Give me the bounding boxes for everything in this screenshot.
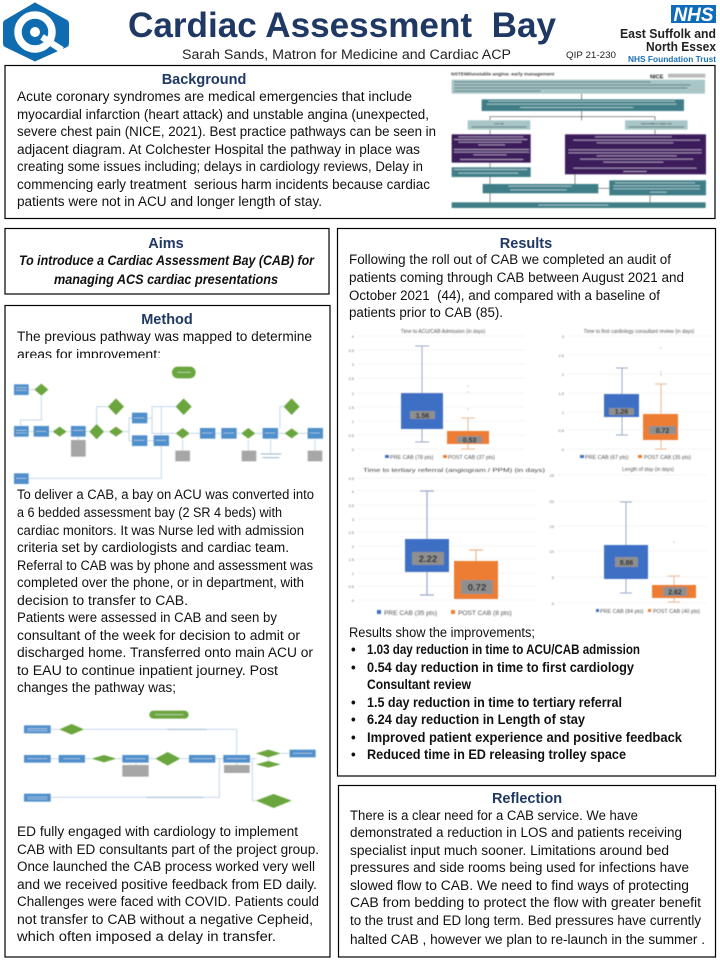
header bbox=[3, 2, 716, 64]
chart: length of stay: 25 bbox=[550, 473, 555, 478]
chart: time to tertiary referral: 1.5 bbox=[348, 557, 355, 562]
chart: time to tertiary referral: 2 bbox=[352, 544, 355, 549]
chart: time to ACU/CAB admission bbox=[348, 329, 525, 461]
heading: reflection: Reflection bbox=[492, 791, 562, 807]
reflection text: slowed flow to CAB. We need to find ways of protecting bbox=[350, 878, 689, 893]
reflection text: specialist input much sooner. Limitations around bed bbox=[350, 843, 669, 858]
chart: time to tertiary referral: 0 bbox=[352, 598, 355, 603]
chart: time to ACU/CAB admission: 0.5 bbox=[348, 433, 355, 438]
reflection text bbox=[350, 808, 705, 947]
flowchart: previous pathway bbox=[8, 358, 328, 488]
diagram: NICE NSTEMI pathway: NICE bbox=[650, 74, 664, 80]
chart: length of stay: 20 bbox=[550, 499, 555, 504]
chart: time to tertiary referral: 1 bbox=[352, 571, 355, 576]
method text: delivering a CAB: Referral to CAB was by phone and assessment was bbox=[17, 558, 313, 573]
background text bbox=[17, 89, 436, 209]
diagram: NICE NSTEMI pathway: Intermediate to higher risk bbox=[641, 121, 672, 125]
chart: time to ACU/CAB admission: 4 bbox=[352, 334, 355, 339]
chart: time to first cardiology consultant review: 2.5 bbox=[558, 353, 565, 358]
method text: delivering a CAB: discharged home. Transferred onto main ACU or bbox=[17, 645, 314, 660]
chart: time to ACU/CAB admission: POST CAB (37 pts) bbox=[448, 455, 495, 461]
chart: time to ACU/CAB admission: PRE CAB (78 pts) bbox=[390, 455, 434, 461]
panel: background bbox=[5, 66, 715, 218]
results improvements list: Improved patient experience and positive feedback bbox=[367, 730, 683, 745]
chart: length of stay: 0 bbox=[552, 601, 555, 606]
chart: time to ACU/CAB admission: 1.5 bbox=[348, 405, 355, 410]
results improvements list: • bbox=[351, 747, 356, 762]
chart: time to first cardiology consultant review: PRE CAB (67 pts) bbox=[585, 455, 629, 461]
chart: length of stay: 15 bbox=[550, 524, 555, 529]
results improvements list: 1.03 day reduction in time to ACU/CAB admission bbox=[367, 642, 640, 657]
NHS trust logo bbox=[620, 5, 716, 64]
results improvements list: Results show the improvements; bbox=[349, 625, 535, 640]
chart: time to first cardiology consultant review: 1 bbox=[562, 410, 565, 415]
reflection text: demonstrated a reduction in LOS and patients receiving bbox=[350, 825, 682, 840]
results improvements list: • bbox=[351, 730, 356, 745]
aims statement: To introduce a Cardiac Assessment Bay (CAB) for bbox=[19, 253, 315, 268]
diagram: NICE NSTEMI pathway: NSTEMI/unstable angina: early management bbox=[451, 72, 555, 77]
panel: aims bbox=[5, 228, 329, 294]
results intro text: October 2021 (44), and compared with a baseline of bbox=[349, 288, 660, 303]
chart: time to tertiary referral: POST CAB (8 pts) bbox=[458, 610, 512, 617]
chart: time to ACU/CAB admission: 0 bbox=[352, 447, 355, 452]
method intro text bbox=[17, 329, 312, 362]
method text: delivering a CAB: decision to transfer to CAB. bbox=[17, 593, 188, 608]
aims statement bbox=[19, 253, 315, 287]
chart: time to tertiary referral: 3.5 bbox=[348, 503, 355, 508]
chart: time to ACU/CAB admission: 2.5 bbox=[348, 376, 355, 381]
chart: time to tertiary referral: 4 bbox=[352, 489, 355, 494]
method text: delivering a CAB: Patients were assessed in CAB and seen by bbox=[17, 610, 277, 625]
chart: time to tertiary referral: 3 bbox=[352, 517, 355, 522]
chart: time to first cardiology consultant review: 1.26 bbox=[615, 409, 628, 416]
heading: results: Results bbox=[500, 236, 552, 252]
chart: time to first cardiology consultant review: Time to first cardiology consultant review (in days) bbox=[584, 329, 695, 335]
method text: delivering a CAB: criteria set by cardiologists and cardiac team. bbox=[17, 540, 289, 555]
reflection text: to the trust and ED long term. Bed pressures have currently bbox=[350, 913, 701, 928]
results improvements list: • bbox=[351, 660, 356, 675]
chart: time to first cardiology consultant review: 1.5 bbox=[558, 391, 565, 396]
chart: time to ACU/CAB admission: 2 bbox=[352, 391, 355, 396]
method text: delivering a CAB: a 6 bedded assessment bay (2 SR 4 beds) with bbox=[17, 505, 282, 520]
NHS trust logo: North Essex bbox=[646, 40, 716, 54]
heading: background: Background bbox=[162, 72, 246, 88]
reflection text: CAB from bedding to protect the flow with greater benefit bbox=[350, 895, 701, 910]
results intro text: patients coming through CAB between August 2021 and bbox=[349, 270, 684, 285]
results improvements list: • bbox=[351, 712, 356, 727]
method text: delivering a CAB: consultant of the week for decision to admit or bbox=[17, 628, 301, 643]
method text: delivering a CAB: cardiac monitors. It was Nurse led with admission bbox=[17, 523, 304, 538]
method text: delivering a CAB bbox=[17, 487, 314, 695]
results improvements list: • bbox=[351, 642, 356, 657]
chart: length of stay: 8.86 bbox=[620, 560, 633, 567]
chart: time to tertiary referral: 4.5 bbox=[348, 476, 355, 481]
method text: delivering a CAB: completed over the phone, or in department, with bbox=[17, 575, 304, 590]
chart: time to tertiary referral bbox=[348, 468, 545, 617]
chart: time to tertiary referral: 0.72 bbox=[468, 582, 486, 594]
chart: time to tertiary referral: Time to tertiary referral (angiogram / PPM) (in days) bbox=[363, 468, 545, 474]
results intro text bbox=[349, 252, 684, 320]
method text: engagement and challenges bbox=[16, 824, 319, 944]
NHS trust logo: East Suffolk and bbox=[620, 27, 716, 41]
chart: time to first cardiology consultant review: 2 bbox=[562, 372, 565, 377]
flowchart: post-change pathway bbox=[24, 711, 316, 808]
NHS trust logo: NHS Foundation Trust bbox=[628, 55, 716, 64]
title: Cardiac Assessment Bay bbox=[128, 6, 557, 45]
diagram: NICE NSTEMI pathway bbox=[451, 72, 706, 208]
method text: engagement and challenges: not transfer to CAB without a negative Cepheid, bbox=[17, 912, 313, 927]
method text: engagement and challenges: Once launched the CAB process worked very well bbox=[17, 859, 315, 874]
method text: engagement and challenges: Challenges were faced with COVID. Patients could bbox=[17, 894, 319, 909]
project code: QIP 21-230 bbox=[566, 50, 616, 61]
diagram: NICE NSTEMI pathway: Low risk bbox=[494, 121, 505, 125]
icon: hexagon Q logo bbox=[3, 2, 69, 62]
panel: method bbox=[5, 306, 330, 957]
results intro text: patients prior to CAB (85). bbox=[349, 305, 503, 320]
chart: length of stay bbox=[550, 467, 707, 615]
chart: time to first cardiology consultant review: 0 bbox=[562, 447, 565, 452]
aims statement: managing ACS cardiac presentations bbox=[54, 272, 278, 287]
chart: time to ACU/CAB admission: Time to ACU/CAB Admission (in days) bbox=[401, 329, 486, 335]
results improvements list: 6.24 day reduction in Length of stay bbox=[367, 712, 586, 727]
subtitle: author: Sarah Sands, Matron for Medicine and Cardiac ACP bbox=[182, 47, 511, 62]
chart: length of stay: 2.62 bbox=[668, 590, 682, 596]
method text: engagement and challenges: and we received positive feedback from ED daily. bbox=[17, 877, 317, 892]
heading: aims: Aims bbox=[148, 236, 184, 252]
results improvements list: 0.54 day reduction in time to first cardiology bbox=[367, 660, 635, 675]
results improvements list: Consultant review bbox=[367, 677, 472, 692]
chart: length of stay: Length of stay (in days) bbox=[622, 467, 674, 473]
method text: delivering a CAB: To deliver a CAB, a bay on ACU was converted into bbox=[17, 487, 314, 502]
background text: Acute coronary syndromes are medical emergencies that include bbox=[17, 89, 412, 104]
panel: reflection bbox=[338, 786, 716, 957]
chart: time to first cardiology consultant review bbox=[558, 329, 713, 461]
results improvements list: • bbox=[351, 695, 356, 710]
method text: engagement and challenges: ED fully engaged with cardiology to implement bbox=[17, 824, 298, 839]
method text: engagement and challenges: CAB with ED consultants part of the project group. bbox=[17, 842, 319, 857]
method text: delivering a CAB: changes the pathway was; bbox=[17, 680, 176, 695]
results improvements list: 1.5 day reduction in time to tertiary referral bbox=[367, 695, 622, 710]
chart: length of stay: POST CAB (40 pts) bbox=[653, 609, 700, 615]
method intro text: The previous pathway was mapped to determine bbox=[17, 329, 312, 344]
background text: patients were not in ACU and longer length of stay. bbox=[17, 194, 322, 209]
chart: time to tertiary referral: PRE CAB (35 pts) bbox=[384, 610, 437, 617]
method intro text: areas for improvement: bbox=[17, 347, 161, 362]
chart: time to first cardiology consultant review: 0.5 bbox=[558, 428, 565, 433]
results intro text: Following the roll out of CAB we completed an audit of bbox=[349, 252, 671, 267]
NHS trust logo: NHS bbox=[674, 5, 714, 26]
chart: time to first cardiology consultant review: 0.72 bbox=[656, 428, 669, 435]
reflection text: pressures and side rooms being used for infections have bbox=[350, 860, 689, 875]
chart: time to ACU/CAB admission: 1.56 bbox=[416, 413, 429, 420]
background text: myocardial infarction (heart attack) and unstable angina (unexpected, bbox=[17, 107, 429, 122]
method text: engagement and challenges: which often imposed a delay in transfer. bbox=[16, 929, 276, 944]
chart: time to ACU/CAB admission: 3.5 bbox=[348, 348, 355, 353]
chart: length of stay: PRE CAB (84 pts) bbox=[600, 609, 644, 615]
background text: creating some issues including; delays in cardiology reviews, Delay in bbox=[17, 159, 423, 174]
background text: commencing early treatment serious harm incidents because cardiac bbox=[17, 177, 430, 192]
method text: delivering a CAB: to EAU to continue inpatient journey. Post bbox=[17, 663, 278, 678]
results improvements list bbox=[349, 625, 683, 762]
background text: severe chest pain (NICE, 2021). Best practice pathways can be seen in bbox=[17, 124, 436, 139]
chart: time to tertiary referral: 2.5 bbox=[348, 530, 355, 535]
chart: time to first cardiology consultant review: POST CAB (35 pts) bbox=[644, 455, 691, 461]
reflection text: halted CAB , however we plan to re-launch in the summer . bbox=[350, 932, 705, 947]
chart: time to ACU/CAB admission: 3 bbox=[352, 362, 355, 367]
results improvements list: Reduced time in ED releasing trolley space bbox=[367, 747, 626, 762]
chart: time to tertiary referral: 2.22 bbox=[419, 554, 437, 565]
chart: time to ACU/CAB admission: 1 bbox=[352, 419, 355, 424]
chart: length of stay: 5 bbox=[552, 575, 555, 580]
panel: results bbox=[338, 228, 716, 776]
chart: time to tertiary referral: 0.5 bbox=[348, 584, 355, 589]
chart: length of stay: 10 bbox=[550, 549, 555, 554]
reflection text: There is a clear need for a CAB service. We have bbox=[350, 808, 638, 823]
heading: method: Method bbox=[141, 312, 193, 328]
chart: time to first cardiology consultant review: 3 bbox=[562, 334, 565, 339]
background text: adjacent diagram. At Colchester Hospital the pathway in place was bbox=[17, 142, 420, 157]
chart: time to ACU/CAB admission: 0.53 bbox=[463, 438, 476, 444]
